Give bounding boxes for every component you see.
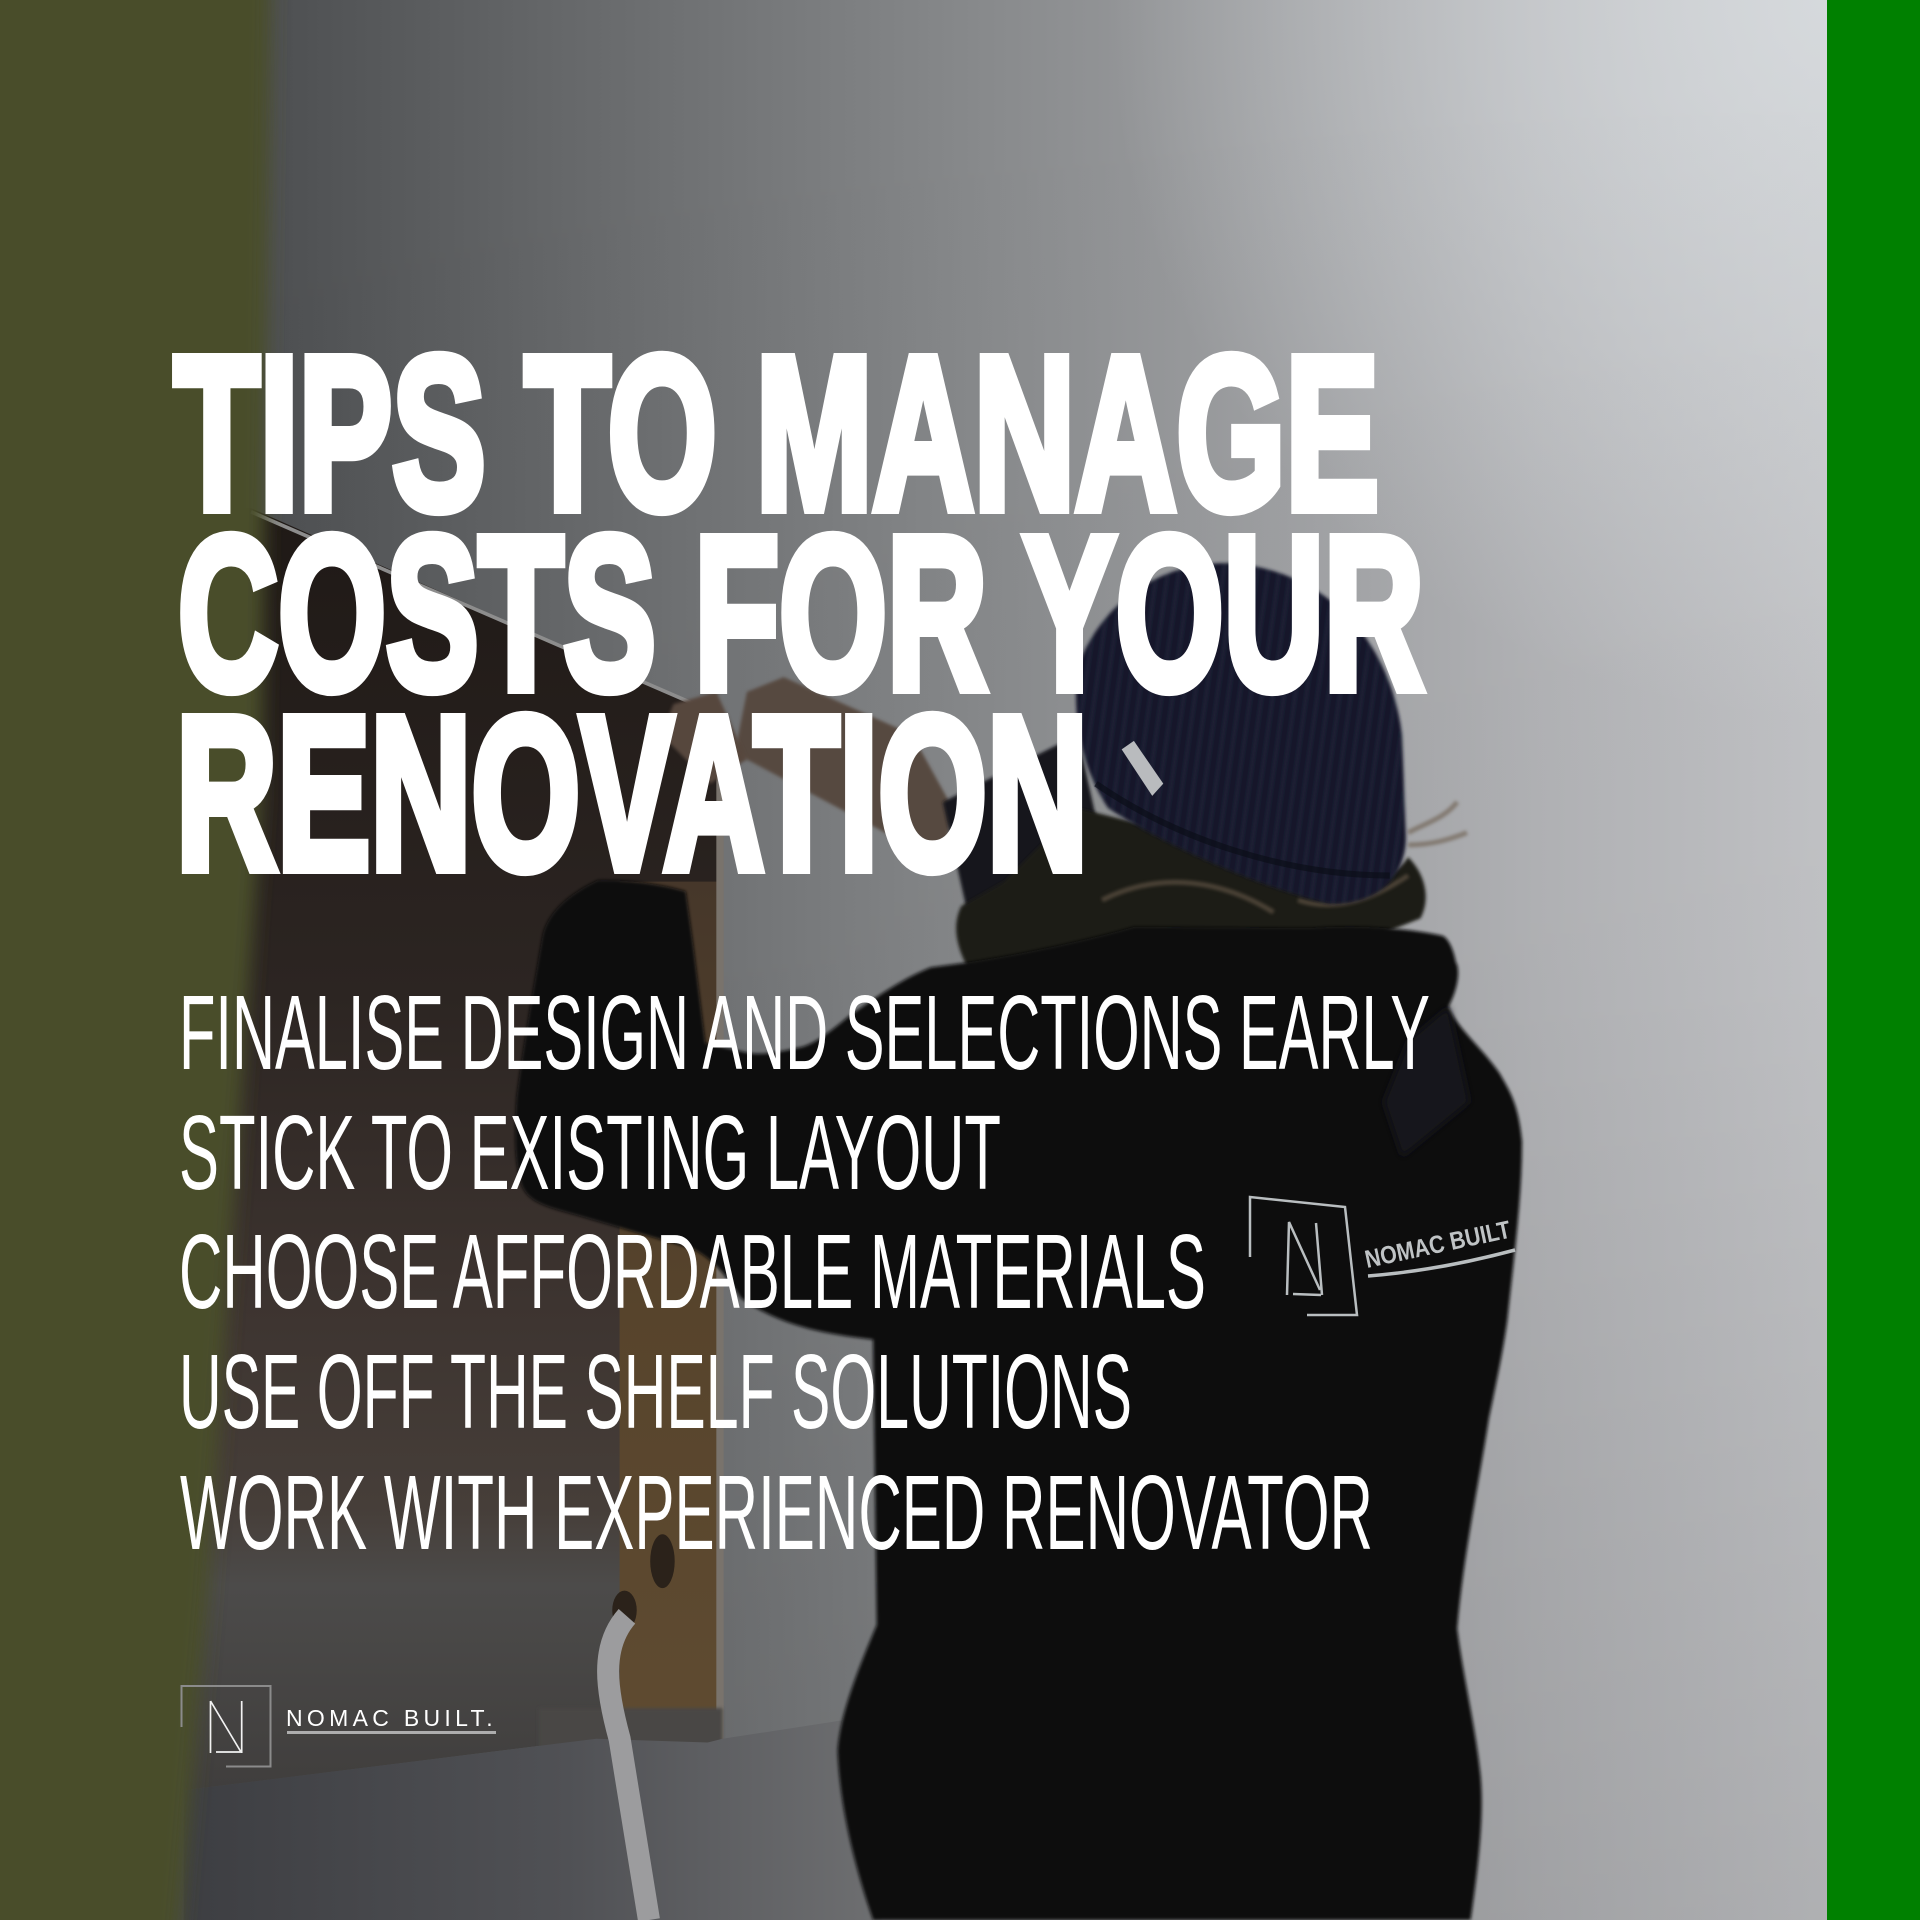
hoodie logo wordmark: NOMAC BUILT	[1362, 1216, 1513, 1274]
icon: hoodie logo	[1250, 1197, 1515, 1315]
green side bar	[1827, 0, 1920, 1920]
brand logo	[182, 1686, 496, 1766]
title: RENOVATION	[176, 672, 1088, 916]
tips list: USE OFF THE SHELF SOLUTIONS	[179, 1333, 1132, 1451]
title	[174, 312, 1424, 916]
tips list	[179, 974, 1430, 1572]
brand wordmark: NOMAC BUILT.	[286, 1705, 496, 1731]
tips list: STICK TO EXISTING LAYOUT	[179, 1094, 1001, 1212]
icon: N square mark	[182, 1686, 270, 1766]
wordmark underline	[287, 1731, 496, 1734]
